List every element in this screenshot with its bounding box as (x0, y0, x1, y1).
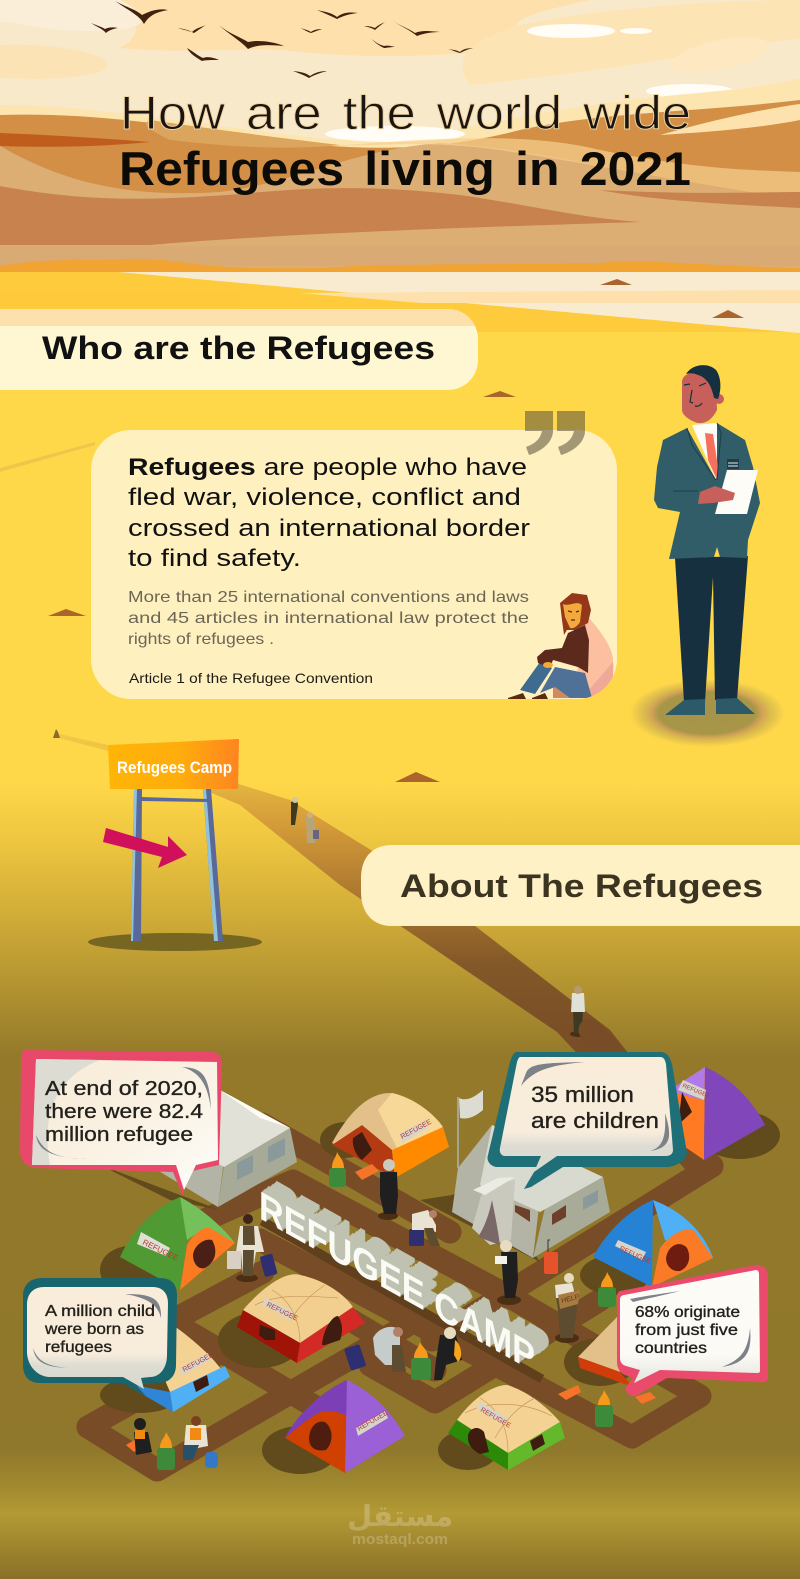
faint streak (0, 442, 95, 472)
ear (714, 394, 724, 404)
person: man with help sign: HELP (561, 1294, 581, 1305)
watermark: Mostaql (347, 1499, 453, 1548)
callout: 68% originate: countries (635, 1340, 707, 1357)
person: seated woman with baby (134, 1418, 152, 1455)
head (682, 372, 717, 423)
callout: a million children born (23, 1278, 177, 1396)
arrow (103, 828, 187, 868)
person: seated man (183, 1416, 218, 1468)
distant dirt mounds (48, 279, 744, 782)
fire barrels (157, 1152, 616, 1470)
callout: 82.4 million refugees (20, 1050, 222, 1196)
shadow (88, 933, 262, 951)
tent: green and cream (448, 1385, 565, 1470)
text: definition: to find safety. (128, 545, 301, 572)
tent: purple upper right (670, 1067, 765, 1160)
text: conventions note (128, 589, 529, 648)
heading pill: About The Refugees: About The Refugees (400, 868, 763, 904)
tent: orange behind speech bubble (578, 1317, 633, 1387)
callout: 82.4 million refugees: million refugee (45, 1123, 193, 1146)
illustration: businessman with clipboard (629, 365, 785, 747)
folding chairs (126, 1164, 656, 1452)
callout: a million children born: were born as (44, 1321, 144, 1338)
trousers (675, 556, 748, 702)
people in the camp (134, 1159, 581, 1468)
sky (0, 0, 800, 272)
text: definition: fled war, violence, conflict and (128, 484, 521, 511)
ground shadow (629, 679, 785, 747)
tent: blue and cream (123, 1328, 230, 1412)
heading pill: About The Refugees (361, 845, 800, 926)
big white tent (left) (150, 1090, 297, 1207)
lettering: REFUGEE CAMP: REFUGEE CAMP (259, 1183, 535, 1382)
tent: orange and cream: REFUGEE (400, 1119, 433, 1141)
tent: blue right (593, 1200, 713, 1287)
tent shadows (100, 1111, 780, 1474)
callout: 35 million children: are children (531, 1108, 659, 1133)
birds (91, 1, 473, 78)
sign: Refugees Camp (88, 739, 262, 951)
hand (698, 486, 735, 504)
person: woman with baby (495, 1240, 521, 1305)
callout: 68% originate: from just five (635, 1322, 738, 1339)
text: source: Article 1 of the Refugee Convention (129, 670, 373, 686)
walker near camp (570, 986, 586, 1037)
section heading pill: Who are the Refugees: Who are the Refugees (42, 330, 435, 366)
person: man on suitcase (409, 1210, 440, 1246)
tiny figure in the distance (53, 729, 60, 738)
face (684, 383, 706, 406)
title: Refugees living in 2021 (119, 142, 691, 195)
camp road network (88, 1030, 712, 1470)
hair (686, 365, 720, 399)
text: conventions note: and 45 articles in international law protect the (128, 610, 529, 627)
tent: orange and cream (332, 1093, 449, 1178)
person: black robe (378, 1159, 398, 1220)
tent: purple lower (285, 1380, 405, 1473)
callout: 68% originate (617, 1265, 768, 1396)
title (119, 86, 691, 195)
tent: red and cream: REFUGEE (265, 1302, 299, 1323)
text: definition (128, 454, 530, 572)
panel: definition card (91, 430, 617, 699)
watermark: Mostaql: mostaql.com (352, 1531, 448, 1548)
title: How are the world wide (120, 86, 691, 139)
jacket (654, 423, 760, 559)
shoes (665, 699, 705, 715)
person: seated man with blanket (344, 1327, 406, 1372)
suitcase: orange (544, 1240, 558, 1274)
icon: seated girl (508, 593, 613, 699)
clipboard (715, 470, 758, 514)
sign: Refugees Camp: Refugees Camp (117, 758, 232, 777)
watermark: Mostaql: مستقل (347, 1499, 453, 1533)
lettering shadow (262, 1221, 542, 1379)
dunes (0, 78, 800, 273)
tent: green and cream: REFUGEE (479, 1407, 512, 1430)
tent: blue and cream: REFUGEE (182, 1352, 215, 1374)
tent: red and cream (237, 1274, 365, 1363)
tent: purple upper right: REFUGEE (681, 1083, 710, 1100)
tent: purple lower: REFUGEE (356, 1410, 390, 1433)
callout: a million children born: A million child (45, 1303, 155, 1320)
text: definition: Refugees are people who have (128, 454, 527, 481)
tent: green: REFUGEE (141, 1238, 180, 1263)
board (108, 739, 239, 789)
callout: a million children born: refugees (45, 1339, 112, 1356)
icon: quotation marks (525, 411, 585, 455)
person: man with suitcase (227, 1214, 278, 1282)
text: conventions note: rights of refugees . (128, 631, 274, 648)
tent: green (120, 1197, 235, 1290)
callout: 68% originate: 68% originate (635, 1304, 740, 1321)
callout: 35 million children: 35 million (531, 1082, 634, 1107)
tent: blue right: REFUGEE (618, 1245, 652, 1266)
person: seated woman (434, 1327, 462, 1380)
section heading pill: Who are the Refugees (0, 309, 478, 390)
callout: 82.4 million refugees: there were 82.4 (45, 1100, 203, 1123)
person: man with help sign (555, 1273, 581, 1343)
big white tent (right) with flag (452, 1090, 610, 1258)
posts (131, 789, 142, 941)
text: definition: crossed an international border (128, 515, 530, 542)
walkers on the road (291, 797, 319, 843)
callout: 35 million children (487, 1052, 687, 1189)
callout: 82.4 million refugees: At end of 2020, (45, 1077, 203, 1100)
flag (457, 1097, 459, 1168)
text: conventions note: More than 25 international conventions and laws (128, 589, 529, 606)
foreground sand bands and salt flats (0, 272, 800, 333)
road to the camp (55, 733, 712, 1185)
